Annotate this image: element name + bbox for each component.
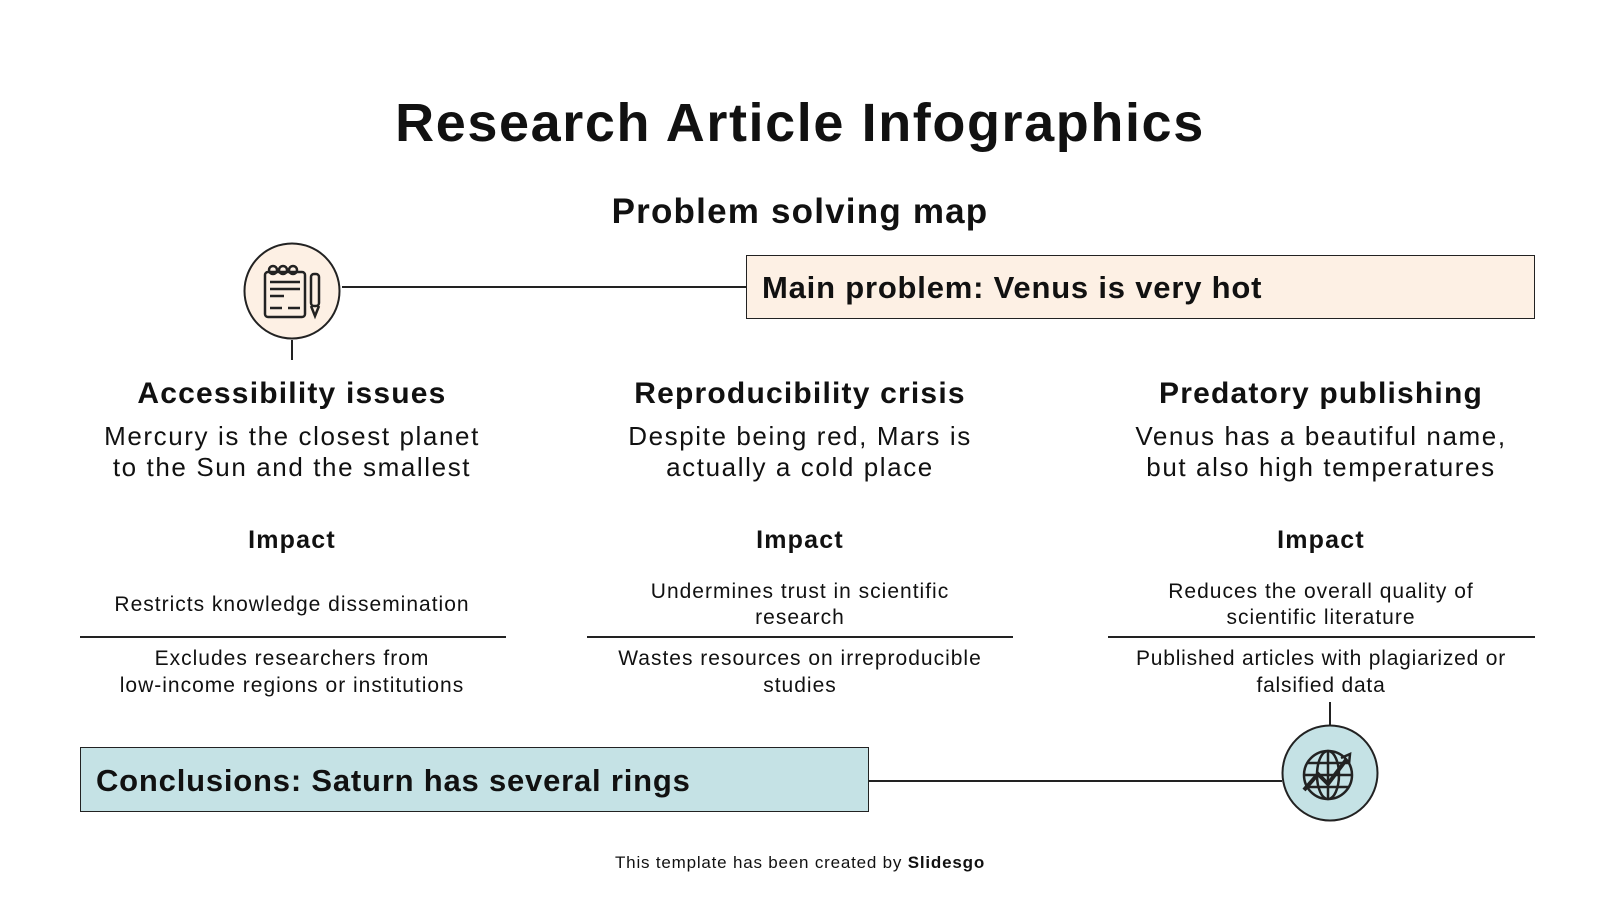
- title: Research Article Infographics: [395, 93, 1205, 153]
- footer: This template has been created by Slidesgo: [615, 853, 985, 872]
- text: studies: [763, 674, 837, 697]
- column 3: [1135, 377, 1507, 629]
- column 2: Undermines trust in scientific: [651, 580, 949, 603]
- column 1: to the Sun and the smallest: [113, 452, 471, 482]
- icon: globe: [1282, 724, 1378, 822]
- column 2: Impact: [756, 526, 844, 554]
- main problem box: Main problem: Venus is very hot: [762, 270, 1262, 305]
- text: falsified data: [1256, 674, 1386, 697]
- column 2: [628, 377, 972, 629]
- column 1: Accessibility issues: [137, 377, 447, 410]
- column 3: Impact: [1277, 526, 1365, 554]
- column 1: Mercury is the closest planet: [104, 421, 480, 451]
- column 3: but also high temperatures: [1146, 452, 1496, 482]
- column 1: [104, 377, 480, 616]
- connector top: [342, 286, 746, 288]
- connector icon down: [291, 340, 293, 360]
- icon: notebook: [244, 242, 340, 340]
- connector globe up: [1329, 702, 1331, 725]
- column 2: research: [755, 606, 845, 629]
- conclusions box: [80, 747, 869, 812]
- subtitle: Problem solving map: [612, 192, 988, 231]
- text: low-income regions or institutions: [120, 674, 464, 697]
- connector bottom: [868, 780, 1282, 782]
- column 1: Impact: [248, 526, 336, 554]
- column 3: Venus has a beautiful name,: [1135, 421, 1507, 451]
- column 2: Reproducibility crisis: [634, 377, 966, 410]
- column 3: Reduces the overall quality of: [1168, 580, 1474, 603]
- column 2: Despite being red, Mars is: [628, 421, 972, 451]
- main problem box: [746, 255, 1535, 319]
- conclusions box: Conclusions: Saturn has several rings: [96, 763, 691, 798]
- column 1: Restricts knowledge dissemination: [114, 593, 470, 616]
- column 3: scientific literature: [1226, 606, 1416, 629]
- text: Excludes researchers from: [155, 647, 429, 670]
- text: Published articles with plagiarized or: [1136, 647, 1506, 670]
- column 2: actually a cold place: [666, 452, 934, 482]
- column 3: Predatory publishing: [1159, 377, 1483, 410]
- text: Wastes resources on irreproducible: [618, 647, 982, 670]
